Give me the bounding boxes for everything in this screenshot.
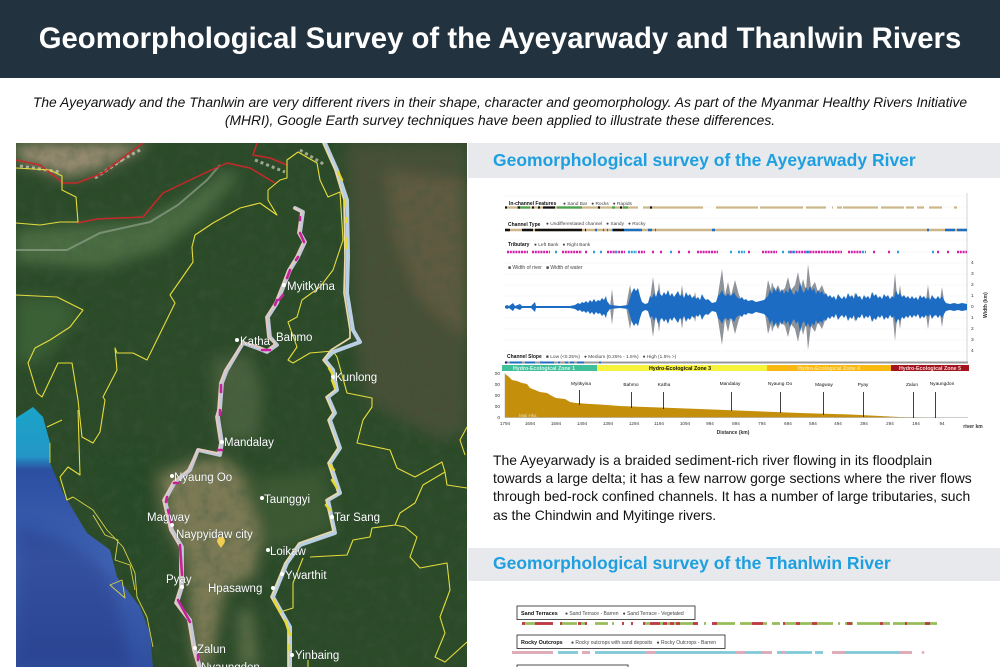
label: Katha: Katha [240,336,271,348]
width axis: 1 [971,315,974,321]
river width chart [505,264,967,350]
elevation profile: Mali Hka [519,413,537,418]
label: Yinbaing: Yinbaing [295,650,339,662]
town labels on elevation profile [571,381,955,388]
section heading: Ayeyarwady [468,143,1000,178]
distance axis: 494 [834,421,842,426]
legend: rocky outcrops: ● Rocky outcrops with sand deposits ● Rocky Outcrops - Barren [571,640,716,646]
legend: sand terraces: Sand Terraces [521,611,558,617]
label: Zalun: Zalun [197,644,226,656]
legend: tributary [508,242,591,248]
town labels on elevation profile: Pyay [858,382,869,388]
town labels on elevation profile: Zalun [906,382,918,388]
distance axis: 94 [939,421,945,426]
legend: rocky outcrops: Rocky Outcrops [521,640,563,646]
place markers [170,283,335,657]
legend: tributary: Tributary [508,242,530,248]
label: Tar Sang: Tar Sang [334,512,380,524]
elevation axis: 0 [497,415,500,421]
hydro-ecological zones: Hydro-Ecological Zone 5 [899,366,961,372]
legend: sand terraces: ● Sand Terrace - Barren ● Sand Terrace - Vegetated [565,611,684,617]
legend: in-channel features: ● Sand Bar ● Rocks ● Rapids [563,201,633,207]
distance axis: 394 [860,421,868,426]
width axis: 1 [971,293,974,299]
label: Hpasawng: Hpasawng [208,583,262,595]
Ayeyarwady description: The Ayeyarwady is a braided sediment-rich river flowing in its floodplain [493,452,932,468]
distance axis: river km [963,424,983,430]
distance axis: 1594 [551,421,562,426]
legend: channel type: ● Undifferentiated channel ● Sandy ● Rocky [546,221,646,227]
width axis: 2 [971,282,974,288]
place labels [147,281,380,667]
row: channel slope [505,361,968,364]
legend: channel type: Channel Type [508,222,541,228]
satellite map of the two rivers [16,143,467,667]
row: sand terraces [522,622,937,625]
town labels on elevation profile: Katha [658,382,671,388]
label: Kunlong: Kunlong [335,372,377,384]
distance axis: 1194 [654,421,664,426]
width axis: 2 [971,326,974,332]
hydro-ecological zones: Hydro-Ecological Zone 3 [649,366,711,372]
distance axis: 794 [758,421,766,426]
legend: channel slope: ■ Low (<0.25%) ● Medium (0.25% - 1.5%) ● High (1.5% >) [546,354,677,360]
label: Bahmo: Bahmo [276,332,312,344]
section heading: Thanlwin: Geomorphological survey of the Thanlwin River [493,553,891,573]
width axis: 3 [971,337,974,343]
legend: in-channel features: In-channel Features [509,201,556,207]
label: Mandalay: Mandalay [224,437,274,449]
distance axis: 594 [809,421,817,426]
Thanlwin river trace [271,143,360,667]
title banner: Geomorphological Survey of the Ayeyarwady and Thanlwin Rivers [39,22,961,55]
distance axis: 1094 [680,421,691,426]
label: Pyay: Pyay [166,574,192,586]
legend: rocky outcrops [517,635,725,648]
town labels on elevation profile: Myitkyina [571,381,591,387]
distance axis: 994 [706,421,714,426]
intro text [33,94,967,128]
width axis: 4 [971,260,974,266]
legend: sand terraces [517,606,695,620]
legend: in-channel features [509,201,633,207]
label: Loikaw: Loikaw [270,546,306,558]
Ayeyarwady survey chart [495,193,989,435]
snow patches [20,150,325,178]
legend box: third category [517,665,628,667]
hydro-ecological zones: Hydro-Ecological Zone 4 [798,366,860,372]
Thanlwin survey chart [512,606,937,667]
Brahmaputra valley channel [16,165,220,250]
width axis: 0 [971,304,974,310]
row: in-channel features [505,206,957,209]
label: Nyaung Oo: Nyaung Oo [174,472,232,484]
row: channel type [505,229,967,231]
width axis: 4 [971,348,974,354]
Ayeyarwady description: as the Chindwin and Myitinge rivers. [493,507,716,523]
section heading: Ayeyarwady: Geomorphological survey of the Ayeyarwady River [493,150,916,170]
distance axis: 1794 [500,421,511,426]
distance axis [500,421,983,436]
distance axis: 1494 [577,421,588,426]
distance axis: 694 [784,421,792,426]
distance axis: 294 [886,421,894,426]
legend: channel type [508,221,646,228]
label: Myitkyina: Myitkyina [287,281,336,293]
hydro-ecological zones: Hydro-Ecological Zone 1 [513,366,575,372]
elevation profile [505,373,968,418]
label: Naypyidaw city: Naypyidaw city [176,529,253,541]
width axis [971,260,989,354]
section heading: Thanlwin [468,548,1000,581]
town labels on elevation profile: Mandalay [720,381,741,387]
title banner [0,0,1000,78]
town labels on elevation profile: Nyaung Oo [768,381,792,387]
legend: width of river and water: ■ Width of river ■ Width of water [508,265,583,271]
town labels on elevation profile: Magway [815,382,834,388]
Ayeyarwady description: towards a large delta; it has a few narrow gorge sections where the river flows [493,470,972,486]
sea: Bay of Bengal [16,407,153,667]
Ayeyarwady description [493,452,972,523]
label: Ywarthit: Ywarthit [285,570,327,582]
town labels on elevation profile: Bahmo [623,382,639,388]
hydro-ecological zones [502,365,969,372]
distance axis: 1694 [525,421,536,426]
town markers on elevation profile [580,390,936,418]
map terrain [16,143,467,667]
Ayeyarwady river trace [163,208,305,667]
width axis: Width (km) [983,292,989,318]
distance axis: 1394 [603,421,614,426]
elevation axis [484,371,500,421]
row: tributaries [507,251,967,253]
distance axis: 894 [732,421,740,426]
legend: channel slope [507,354,677,360]
international and state borders [16,143,467,667]
intro text: The Ayeyarwady and the Thanlwin are very different rivers in their shape, character and geomorphology. As part of the Myanmar Healthy Rivers Initiative [33,94,967,110]
intro text: (MHRI), Google Earth survey techniques have been applied to illustrate these differences. [225,112,775,128]
row: rocky outcrops [512,651,924,654]
label: Taunggyi: Taunggyi [264,494,310,506]
legend: tributary: ● Left Bank ● Right Bank [534,242,591,248]
town labels on elevation profile: Nyaungdon [930,381,955,387]
label: Magway: Magway [147,512,190,524]
width axis: 3 [971,271,974,277]
Ayeyarwady description: through bed-rock confined channels. It has a number of large tributaries, such [493,488,970,504]
distance axis: 194 [912,421,920,426]
legend: channel slope: Channel Slope [507,354,542,360]
chart gridlines and axis [505,193,967,362]
distance axis: 1294 [629,421,640,426]
